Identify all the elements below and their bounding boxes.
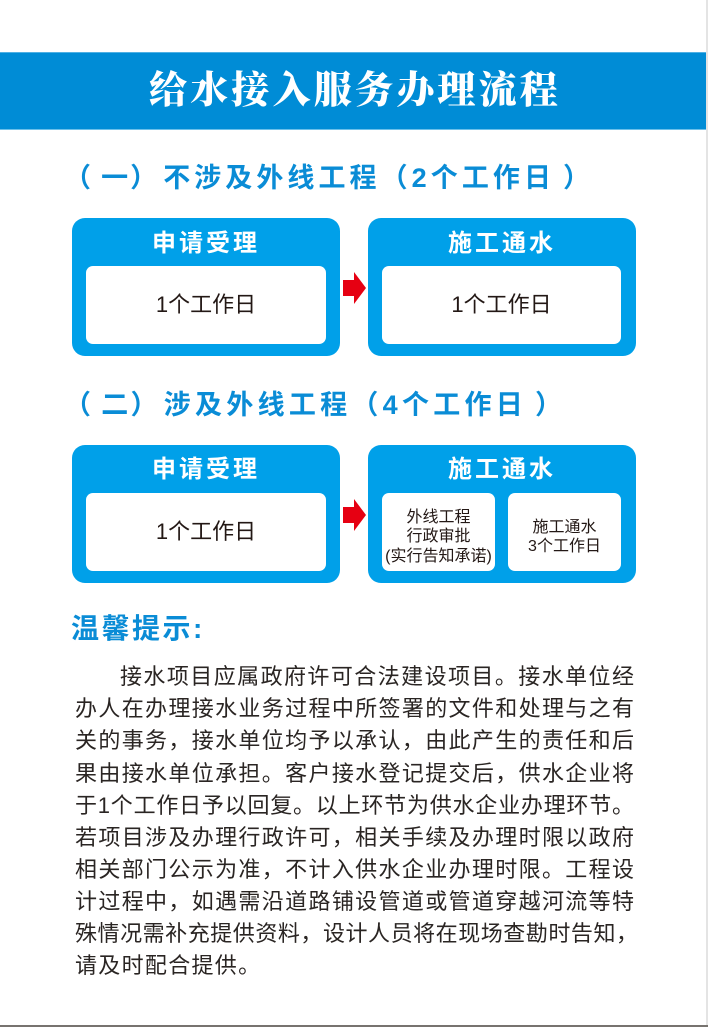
arrow: row one	[343, 272, 366, 304]
external works approval: 外线工程	[406, 509, 470, 526]
reminder text: 相关部门公示为准，不计入供水企业办理时限。工程设	[75, 857, 634, 882]
construction duration	[508, 493, 621, 571]
reminder text: 计过程中，如遇需沿道路铺设管道或管道穿越河流等特	[75, 889, 634, 914]
reminder text	[75, 664, 638, 978]
application duration	[86, 493, 326, 571]
panel: water connection	[368, 218, 636, 356]
reminder text: 于1个工作日予以回复。以上环节为供水企业办理环节。	[75, 793, 634, 818]
reminder text: 若项目涉及办理行政许可，相关手续及办理时限以政府	[75, 825, 634, 850]
connection duration	[382, 266, 621, 344]
application duration: 1个工作日	[156, 292, 256, 316]
external works approval: (实行告知承诺)	[385, 548, 492, 565]
external works approval	[382, 493, 495, 571]
reminder text: 果由接水单位承担。客户接水登记提交后，供水企业将	[75, 761, 634, 786]
reminder text: 接水项目应属政府许可合法建设项目。接水单位经	[120, 664, 634, 689]
heading: application: 申请受理	[152, 230, 260, 257]
application duration: 1个工作日	[156, 518, 256, 544]
construction duration: 施工通水	[532, 518, 596, 536]
heading: application: 申请受理	[152, 456, 260, 483]
section heading two: （二）涉及外线工程（4个工作日 ）	[64, 390, 562, 420]
reminder text: 关的事务，接水单位均予以承认，由此产生的责任和后	[75, 728, 634, 753]
reminder text: 殊情况需补充提供资料，设计人员将在现场查勘时告知，	[75, 921, 638, 946]
connection duration: 1个工作日	[451, 292, 552, 316]
heading: water connection: 施工通水	[448, 456, 556, 483]
flow row two	[72, 445, 636, 583]
construction duration: 3个工作日	[528, 538, 601, 555]
panel: application	[72, 218, 340, 356]
panel: application	[72, 445, 340, 583]
panel: water connection	[368, 445, 636, 583]
flow row one	[72, 218, 636, 356]
section heading one: （一）不涉及外线工程（2个工作日 ）	[64, 163, 590, 193]
reminder heading: 温馨提示:	[71, 613, 205, 644]
title: 给水接入服务办理流程	[149, 70, 561, 112]
reminder text: 办人在办理接水业务过程中所签署的文件和处理与之有	[75, 696, 634, 721]
title band	[0, 52, 708, 130]
reminder text: 请及时配合提供。	[75, 953, 261, 978]
arrow: row two	[343, 499, 366, 531]
external works approval: 行政审批	[406, 528, 470, 545]
heading: water connection: 施工通水	[448, 230, 556, 257]
application duration	[86, 266, 326, 344]
